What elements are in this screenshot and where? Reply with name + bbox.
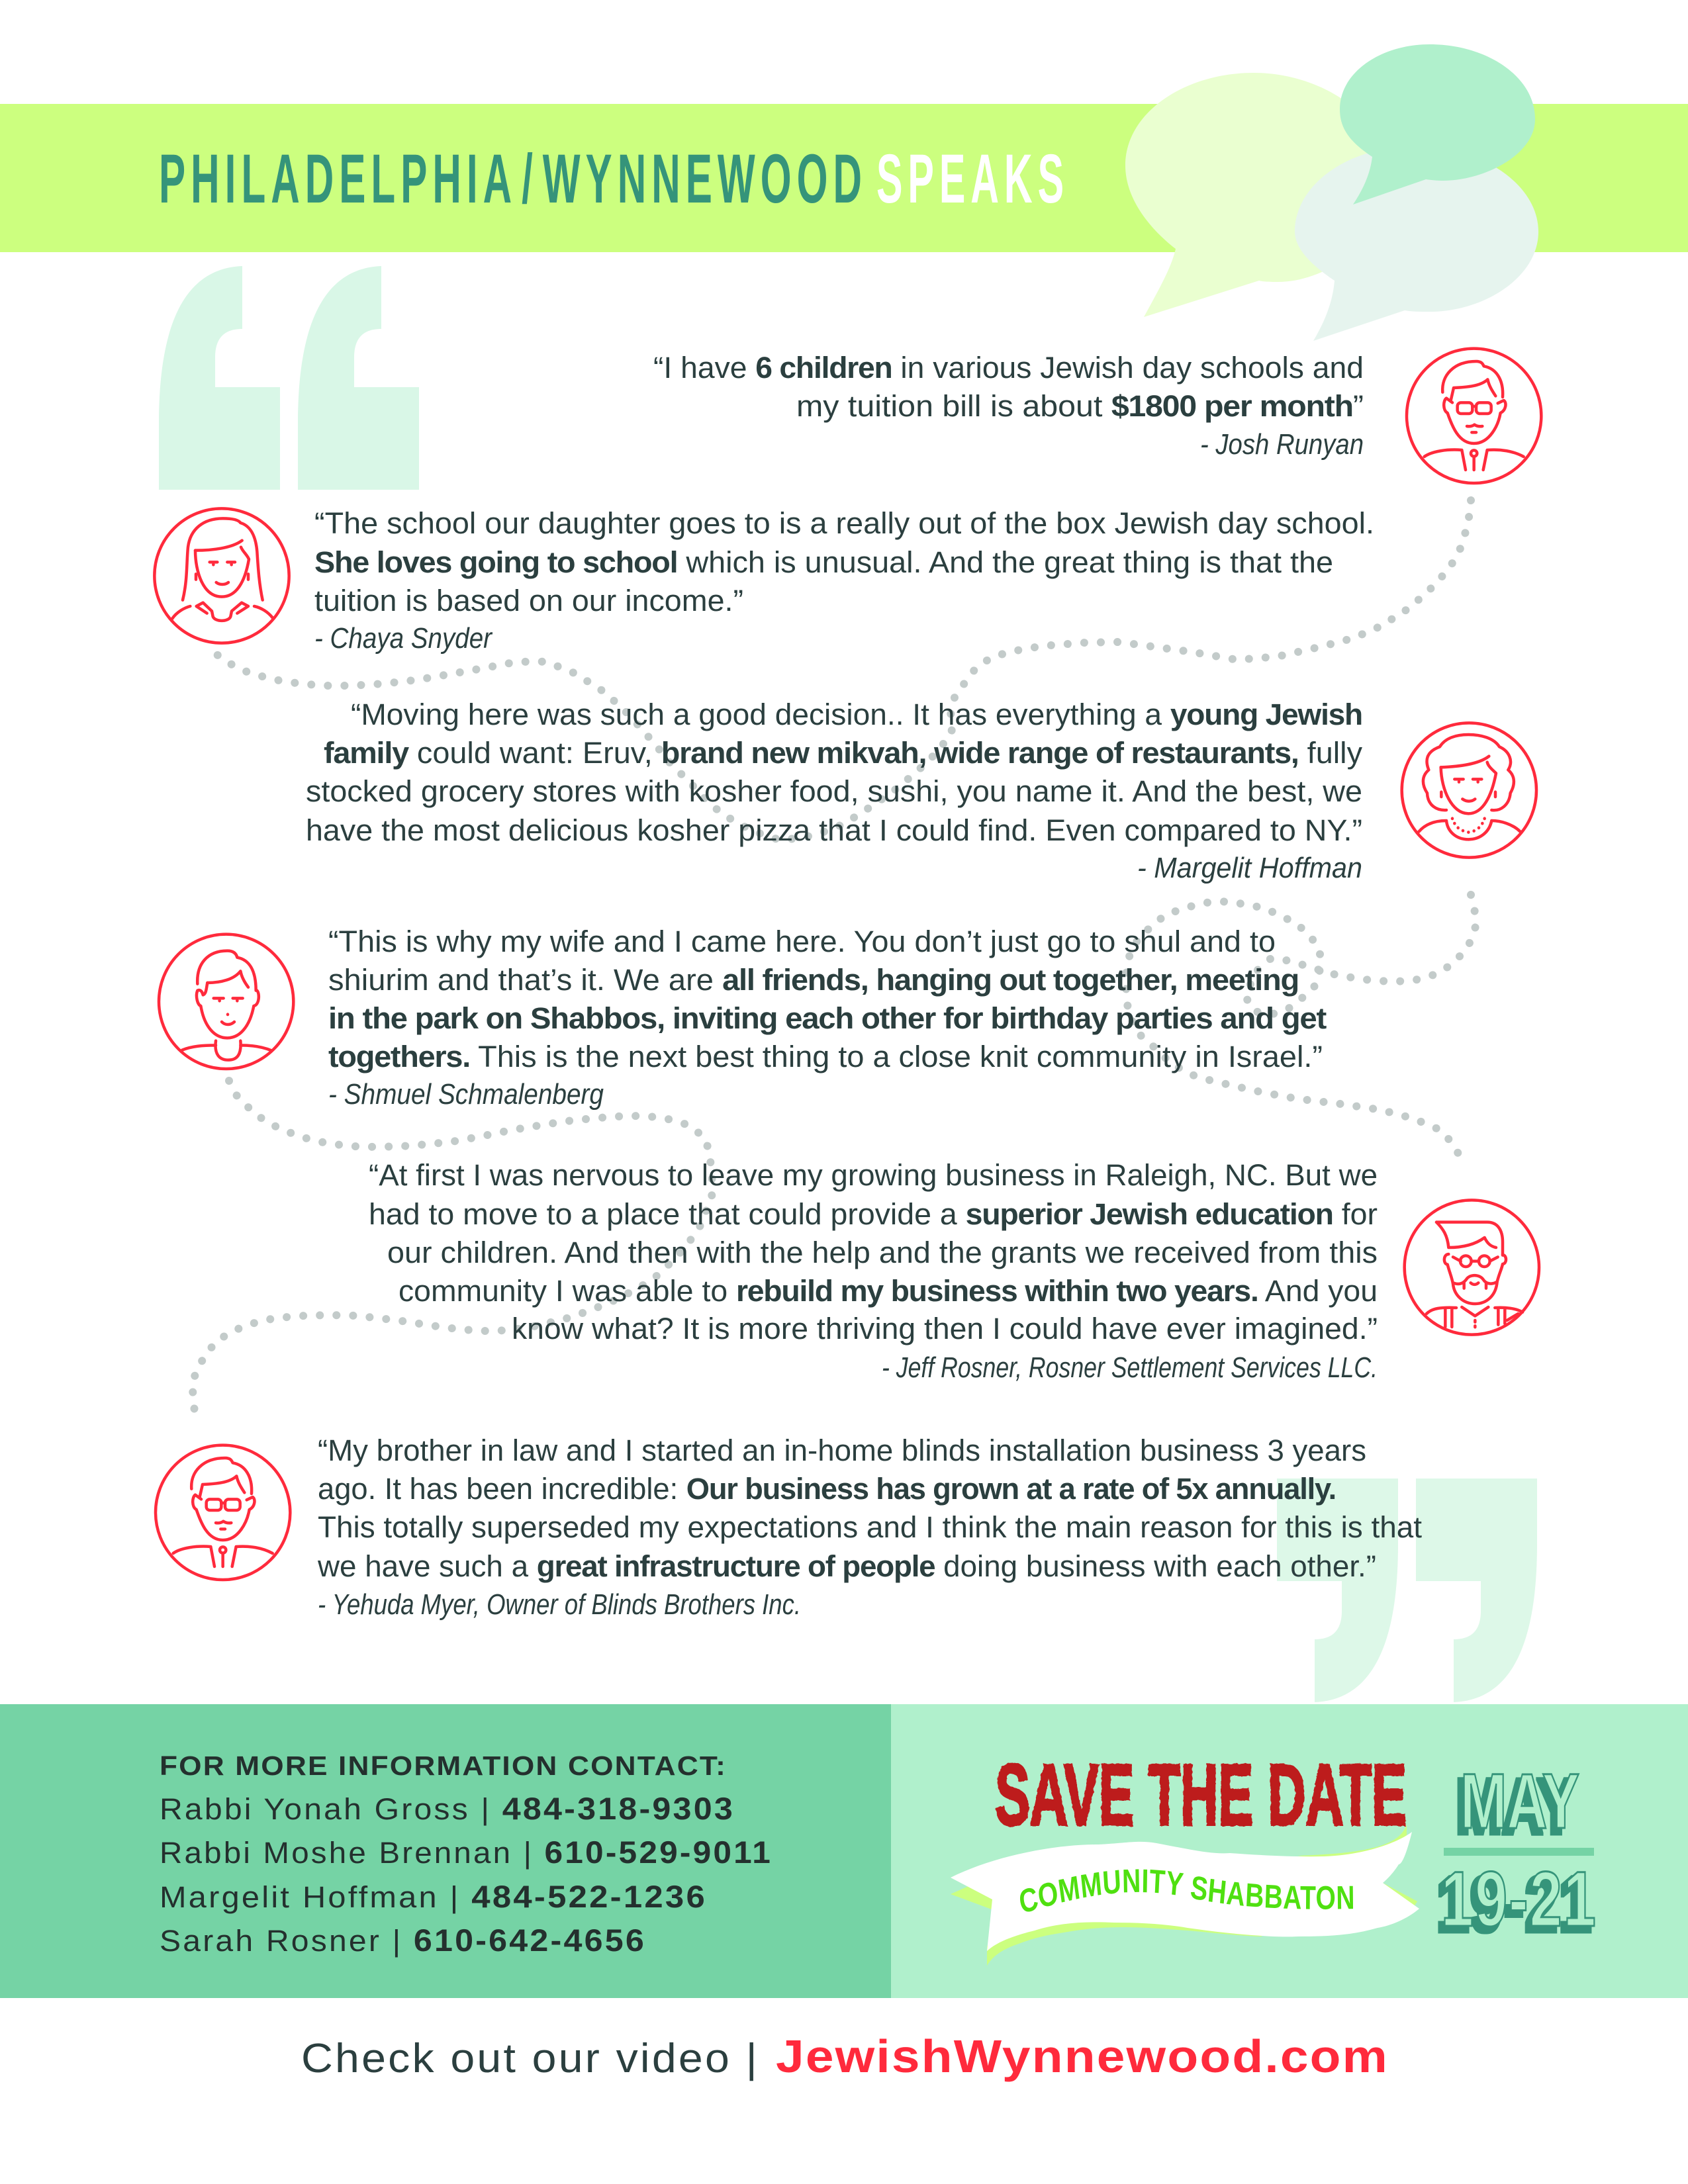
dotted connector: Shmuel to Yehuda xyxy=(193,1081,712,1422)
quote: Chaya Snyder: tuition is based on our income.” xyxy=(314,584,743,617)
quote: Chaya Snyder: - Chaya Snyder xyxy=(314,622,493,655)
title: SPEAKS xyxy=(876,140,1069,218)
closing quotation mark xyxy=(1277,1479,1537,1702)
opening quotation mark xyxy=(159,266,419,490)
header band xyxy=(0,104,1688,252)
quote: Margelit Hoffman xyxy=(306,698,1363,884)
quote: Yehuda Myer: we have such a great infrastructure of people doing business with each other.” xyxy=(317,1549,1376,1583)
contact list xyxy=(160,1791,773,1958)
contact heading: FOR MORE INFORMATION CONTACT: xyxy=(160,1751,727,1781)
avatar: Josh Runyan xyxy=(1407,349,1541,483)
quote: Margelit Hoffman: - Margelit Hoffman xyxy=(1137,852,1362,884)
banner shadow xyxy=(951,1825,1417,1966)
bubble: pale grey-green xyxy=(1295,146,1538,341)
bubble: light green xyxy=(1125,73,1390,317)
banner ribbon xyxy=(951,1832,1419,1951)
quote: Shmuel Schmalenberg: togethers. This is the next best thing to a close knit community in Israel.” xyxy=(328,1040,1323,1073)
dotted connector: Margelit loop xyxy=(1125,895,1476,1154)
avatar: Chaya Snyder xyxy=(154,508,289,643)
icon: speech bubbles xyxy=(1125,44,1538,341)
quote: Jeff Rosner: “At first I was nervous to leave my growing business in Raleigh, NC. But we xyxy=(369,1158,1378,1192)
quote: Shmuel Schmalenberg: - Shmuel Schmalenberg xyxy=(328,1078,604,1111)
title: PHILADELPHIA/WYNNEWOOD xyxy=(159,140,867,218)
quote: Margelit Hoffman: stocked grocery stores with kosher food, sushi, you name it. And the best, we xyxy=(306,774,1362,808)
contact list: Rabbi Moshe Brennan | 610-529-9011 xyxy=(160,1835,773,1870)
quote: Yehuda Myer: This totally superseded my expectations and I think the main reason for this is that xyxy=(318,1510,1423,1544)
footer call to action: Check out our video | xyxy=(301,2036,759,2081)
quote: Shmuel Schmalenberg: shiurim and that’s it. We are all friends, hanging out together, meeting xyxy=(328,963,1299,997)
quote: Yehuda Myer: ago. It has been incredible: Our business has grown at a rate of 5x annually. xyxy=(318,1472,1336,1506)
quote: Shmuel Schmalenberg: “This is why my wife and I came here. You don’t just go to shul and to xyxy=(328,925,1276,958)
quote: Jeff Rosner: know what? It is more thriving then I could have ever imagined.” xyxy=(512,1312,1378,1345)
avatar: Shmuel Schmalenberg xyxy=(159,934,293,1069)
banner xyxy=(951,1825,1419,1966)
date: 19-21: 19-21 xyxy=(1441,1856,1597,1943)
contact list: Sarah Rosner | 610-642-4656 xyxy=(160,1923,646,1958)
quote: Josh Runyan: - Josh Runyan xyxy=(1200,428,1364,461)
quote: Jeff Rosner: community I was able to rebuild my business within two years. And you xyxy=(399,1274,1378,1308)
quote: Josh Runyan: my tuition bill is about $1800 per month ” xyxy=(796,389,1364,423)
quote: Jeff Rosner: our children. And then with the help and the grants we received from this xyxy=(387,1236,1378,1269)
panel: save the date xyxy=(891,1704,1688,1998)
quote: Josh Runyan xyxy=(653,351,1364,461)
heading: save the date: SAVE THE DATE xyxy=(995,1746,1407,1843)
quote: Shmuel Schmalenberg xyxy=(328,925,1327,1111)
avatar: Yehuda Myer xyxy=(156,1445,290,1580)
footer call to action xyxy=(301,2030,1389,2082)
bubble: mint xyxy=(1340,44,1535,205)
avatar: Margelit Hoffman xyxy=(1402,723,1536,858)
quote: Josh Runyan: “I have 6 children in various Jewish day schools and xyxy=(653,351,1364,385)
quote: Jeff Rosner: - Jeff Rosner, Rosner Settlement Services LLC. xyxy=(882,1351,1378,1384)
quote: Yehuda Myer: - Yehuda Myer, Owner of Blinds Brothers Inc. xyxy=(318,1588,801,1621)
date: May: MAY xyxy=(1460,1758,1579,1845)
quote: Yehuda Myer xyxy=(317,1433,1423,1621)
avatar: Jeff Rosner xyxy=(1405,1200,1539,1335)
quote: Chaya Snyder: “The school our daughter goes to is a really out of the box Jewish day school. xyxy=(314,506,1374,540)
contact list: Rabbi Yonah Gross | 484-318-9303 xyxy=(160,1791,735,1826)
dotted connector: Josh to Chaya section xyxy=(216,500,1471,841)
quote: Margelit Hoffman: family could want: Eruv, brand new mikvah, wide range of restaurants, fully xyxy=(324,736,1363,770)
footer call to action: JewishWynnewood.com xyxy=(776,2030,1389,2082)
quote: Margelit Hoffman: “Moving here was such a good decision.. It has everything a young Jewish xyxy=(351,698,1362,731)
contact list: Margelit Hoffman | 484-522-1236 xyxy=(160,1879,707,1914)
quote: Chaya Snyder xyxy=(314,506,1374,655)
panel: contact information xyxy=(0,1704,891,1998)
date divider xyxy=(1444,1848,1594,1856)
quote: Chaya Snyder: She loves going to school which is unusual. And the great thing is that the xyxy=(314,545,1333,579)
banner text: COMMUNITY SHABBATON xyxy=(1020,1869,1353,1911)
quote: Jeff Rosner: had to move to a place that could provide a superior Jewish education for xyxy=(369,1197,1378,1231)
quote: Margelit Hoffman: have the most delicious kosher pizza that I could find. Even compared to NY.” xyxy=(306,813,1362,847)
quote: Jeff Rosner xyxy=(369,1158,1378,1384)
quote: Shmuel Schmalenberg: in the park on Shabbos, inviting each other for birthday parties and get xyxy=(328,1001,1327,1035)
quote: Yehuda Myer: “My brother in law and I started an in-home blinds installation business 3 years xyxy=(318,1433,1366,1467)
